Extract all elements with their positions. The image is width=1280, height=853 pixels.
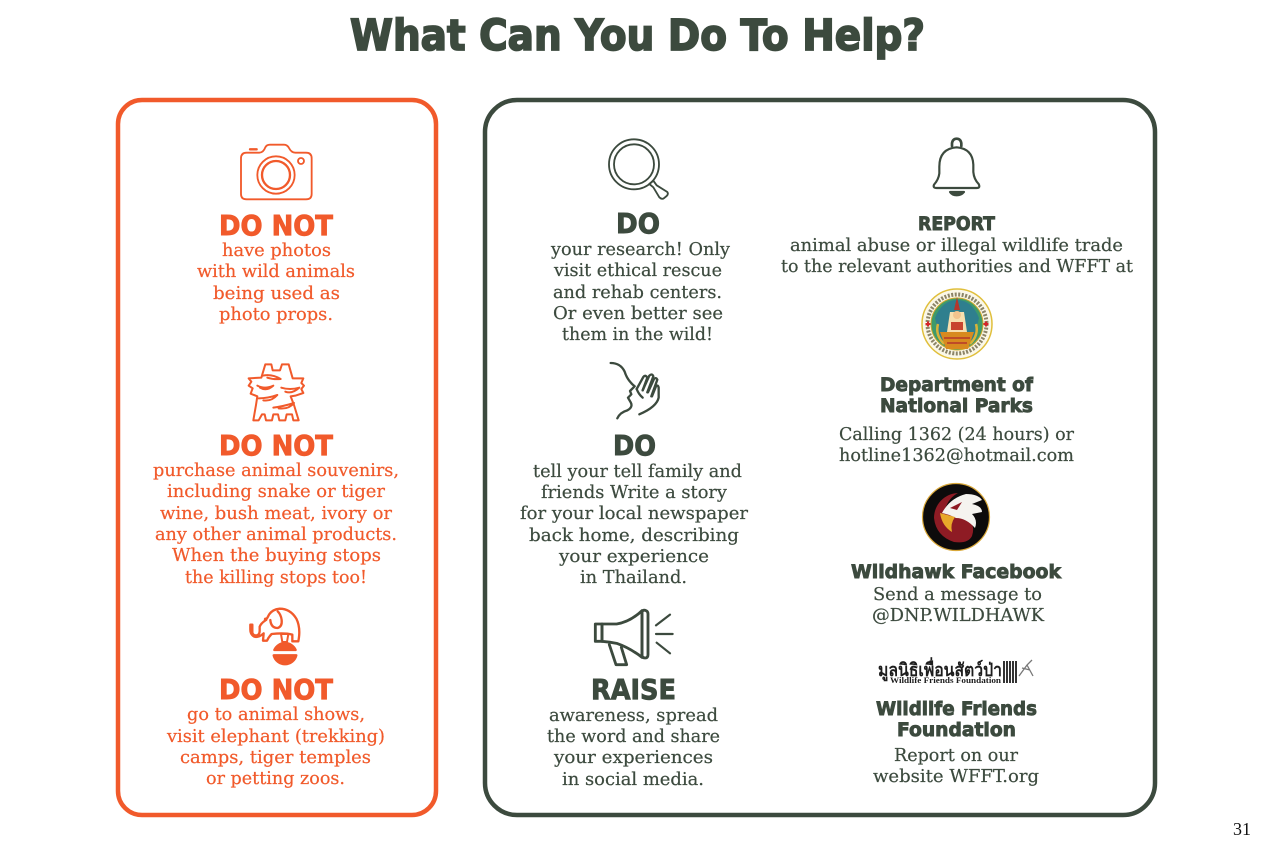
text: report on website: [873, 745, 1039, 787]
text: tell family: in Thailand.: [580, 567, 687, 588]
icon: megaphone: [595, 610, 673, 665]
text: photo props: [197, 240, 355, 325]
text: report abuse: [781, 235, 1134, 277]
text: photo props: have photos: [222, 240, 331, 261]
text: souvenirs: the killing stops too!: [185, 567, 367, 588]
icon: magnifying glass: [609, 139, 668, 199]
icon: camera: [241, 145, 312, 199]
text: research: them in the wild!: [562, 324, 713, 345]
heading: do not: DO NOT: [219, 209, 333, 242]
panel outline: green: [485, 100, 1155, 815]
logo: national parks seal: [922, 289, 992, 359]
panel: do and report: [485, 100, 1155, 815]
text: send a message: Send a message to: [873, 584, 1042, 605]
text: tell family: your experience: [558, 546, 709, 567]
text: send a message: [872, 584, 1045, 626]
text: awareness: [547, 705, 720, 790]
text: photo props: being used as: [213, 283, 340, 304]
heading: wildlife friends foundation: [876, 698, 1037, 741]
text: report on website: website WFFT.org: [873, 766, 1039, 787]
block: report: [781, 139, 1134, 277]
text: report on website: Report on our: [894, 745, 1018, 766]
heading: wildhawk facebook: Wildhawk Facebook: [851, 561, 1061, 583]
heading: do not: DO NOT: [219, 429, 333, 462]
text: hotline: hotline1362@hotmail.com: [839, 445, 1074, 466]
text: tell family: [520, 461, 748, 588]
logo: wildlife friends foundation: มูลนิธิเพื่อนสัตว์ป่า: [878, 657, 1002, 682]
text: research: and rehab centers.: [553, 282, 722, 303]
text: animal shows: [166, 704, 385, 789]
text: tell family: tell your tell family and: [533, 461, 742, 482]
block: wildlife friends foundation: [873, 657, 1039, 787]
block: do not attend shows: [166, 609, 385, 789]
heading: raise: RAISE: [591, 673, 676, 706]
text: souvenirs: including snake or tiger: [167, 481, 385, 502]
text: awareness: your experiences: [553, 747, 713, 768]
title: What Can You Do To Help?: [350, 11, 925, 61]
text: tell family: for your local newspaper: [520, 503, 748, 524]
text: animal shows: or petting zoos.: [206, 768, 345, 789]
block: do tell family: [520, 363, 748, 588]
text: awareness: the word and share: [547, 726, 720, 747]
text: tell family: friends Write a story: [541, 482, 728, 503]
icon: elephant on ball: [250, 609, 299, 664]
text: research: visit ethical rescue: [553, 260, 722, 281]
text: research: Or even better see: [553, 303, 723, 324]
icon: bell: [934, 139, 979, 195]
text: souvenirs: purchase animal souvenirs,: [153, 460, 399, 481]
heading: wildlife friends foundation: Wildlife Friends: [876, 698, 1037, 720]
text: awareness: in social media.: [562, 769, 704, 790]
heading: department of national parks: [880, 374, 1034, 417]
heading: department of national parks: National Parks: [880, 395, 1033, 417]
text: souvenirs: When the buying stops: [172, 545, 381, 566]
block: do not buy souvenirs: [153, 364, 399, 588]
heading: department of national parks: Department of: [880, 374, 1034, 396]
panel: do not: [118, 100, 436, 815]
text: hotline: [839, 424, 1074, 466]
text: research: [550, 239, 731, 345]
text: send a message: @DNP.WILDHAWK: [872, 605, 1045, 626]
heading: do: DO: [616, 207, 660, 240]
icon: animal skin: [249, 364, 304, 420]
block: wildhawk: [851, 484, 1061, 626]
text: photo props: with wild animals: [197, 261, 355, 282]
text: report abuse: animal abuse or illegal wildlife trade: [790, 235, 1123, 256]
text: report abuse: to the relevant authorities and WFFT at: [781, 256, 1134, 277]
block: department of national parks: [839, 289, 1074, 466]
text: animal shows: go to animal shows,: [187, 704, 365, 725]
heading: do not: DO NOT: [219, 673, 333, 706]
block: do your research: [550, 139, 731, 345]
text: awareness: awareness, spread: [549, 705, 718, 726]
logo: wildlife friends foundation: Wildlife Friends Foundation: [890, 676, 1002, 685]
text: animal shows: visit elephant (trekking): [166, 726, 385, 747]
page number: 31: [1233, 819, 1251, 839]
text: photo props: photo props.: [219, 304, 333, 325]
text: hotline: Calling 1362 (24 hours) or: [839, 424, 1074, 445]
text: souvenirs: any other animal products.: [155, 524, 397, 545]
text: tell family: back home, describing: [529, 525, 739, 546]
block: do not take photos: [197, 145, 355, 325]
logo: wildlife friends foundation: [878, 657, 1033, 685]
heading: report: REPORT: [918, 213, 995, 235]
text: souvenirs: [153, 460, 399, 588]
text: animal shows: camps, tiger temples: [180, 747, 371, 768]
panel outline: orange: [118, 100, 436, 815]
text: souvenirs: wine, bush meat, ivory or: [160, 503, 392, 524]
icon: whispering face: [611, 363, 659, 418]
logo: wildhawk eagle: [922, 484, 990, 550]
text: research: your research! Only: [550, 239, 731, 260]
heading: wildlife friends foundation: Foundation: [897, 719, 1016, 741]
block: raise awareness: [547, 610, 720, 790]
heading: do: DO: [613, 429, 656, 462]
